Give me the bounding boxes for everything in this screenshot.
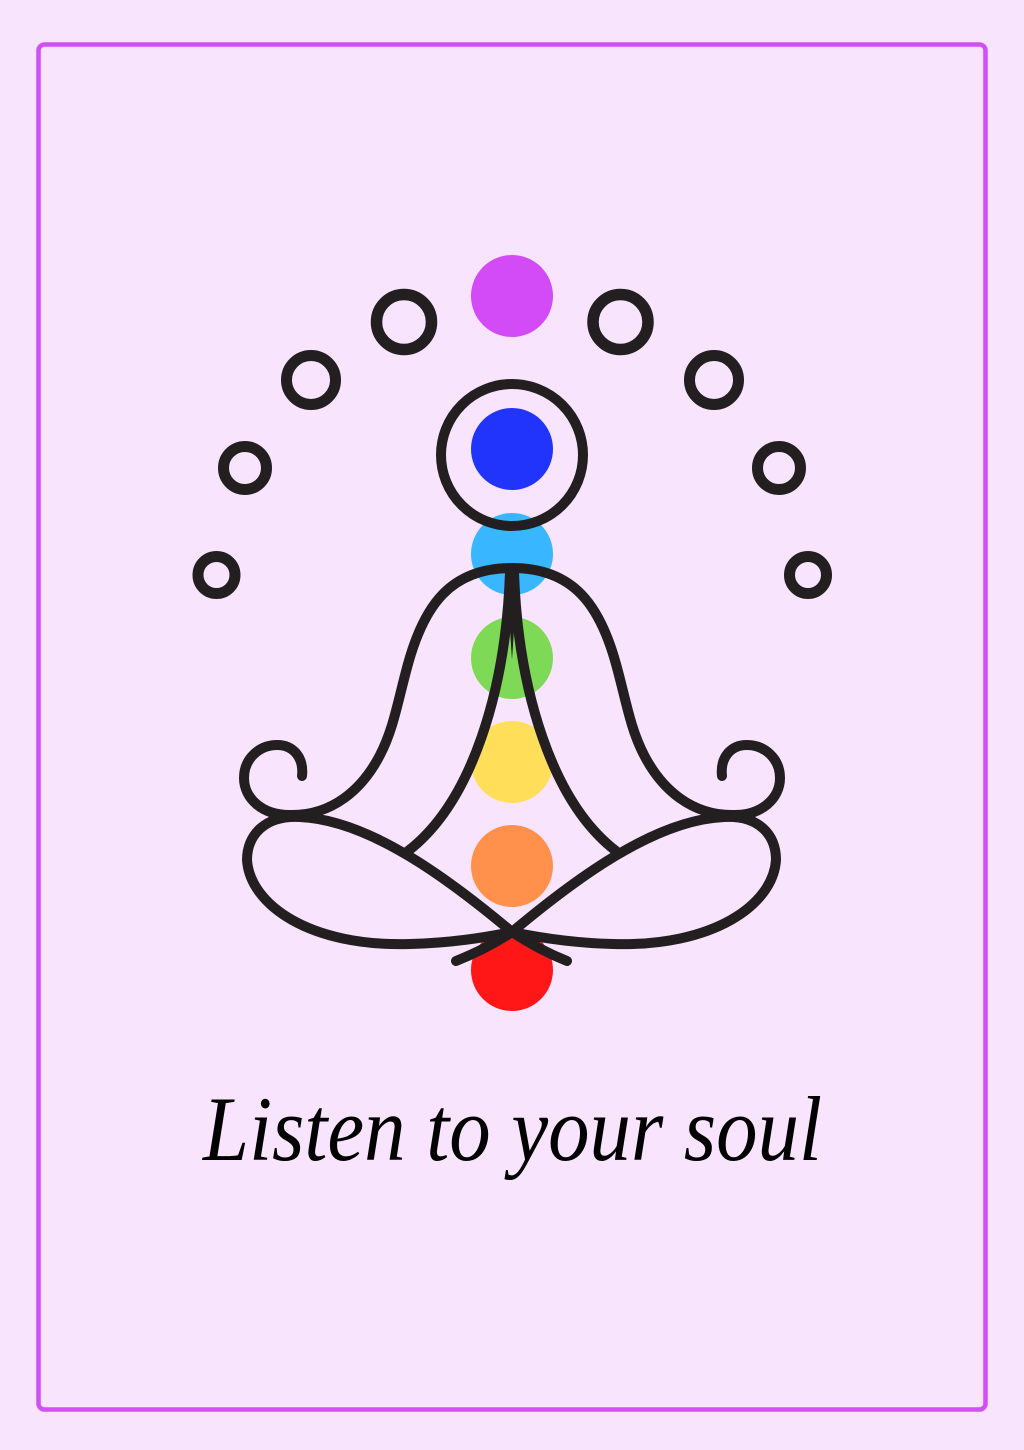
left leg and foot: [247, 817, 567, 961]
right inner arm: [514, 572, 616, 851]
arc of energy rings: [198, 294, 826, 594]
right leg and foot: [456, 817, 776, 961]
chakra dots: [471, 255, 553, 1011]
meditating figure: [244, 384, 780, 961]
tagline: Listen to your soul: [201, 1078, 822, 1180]
right shoulder, arm and curled hand: [512, 568, 780, 815]
centre of joined palms: [506, 570, 518, 660]
left shoulder, arm and curled hand: [244, 568, 512, 815]
left inner arm: [408, 572, 510, 851]
head: [441, 384, 583, 526]
